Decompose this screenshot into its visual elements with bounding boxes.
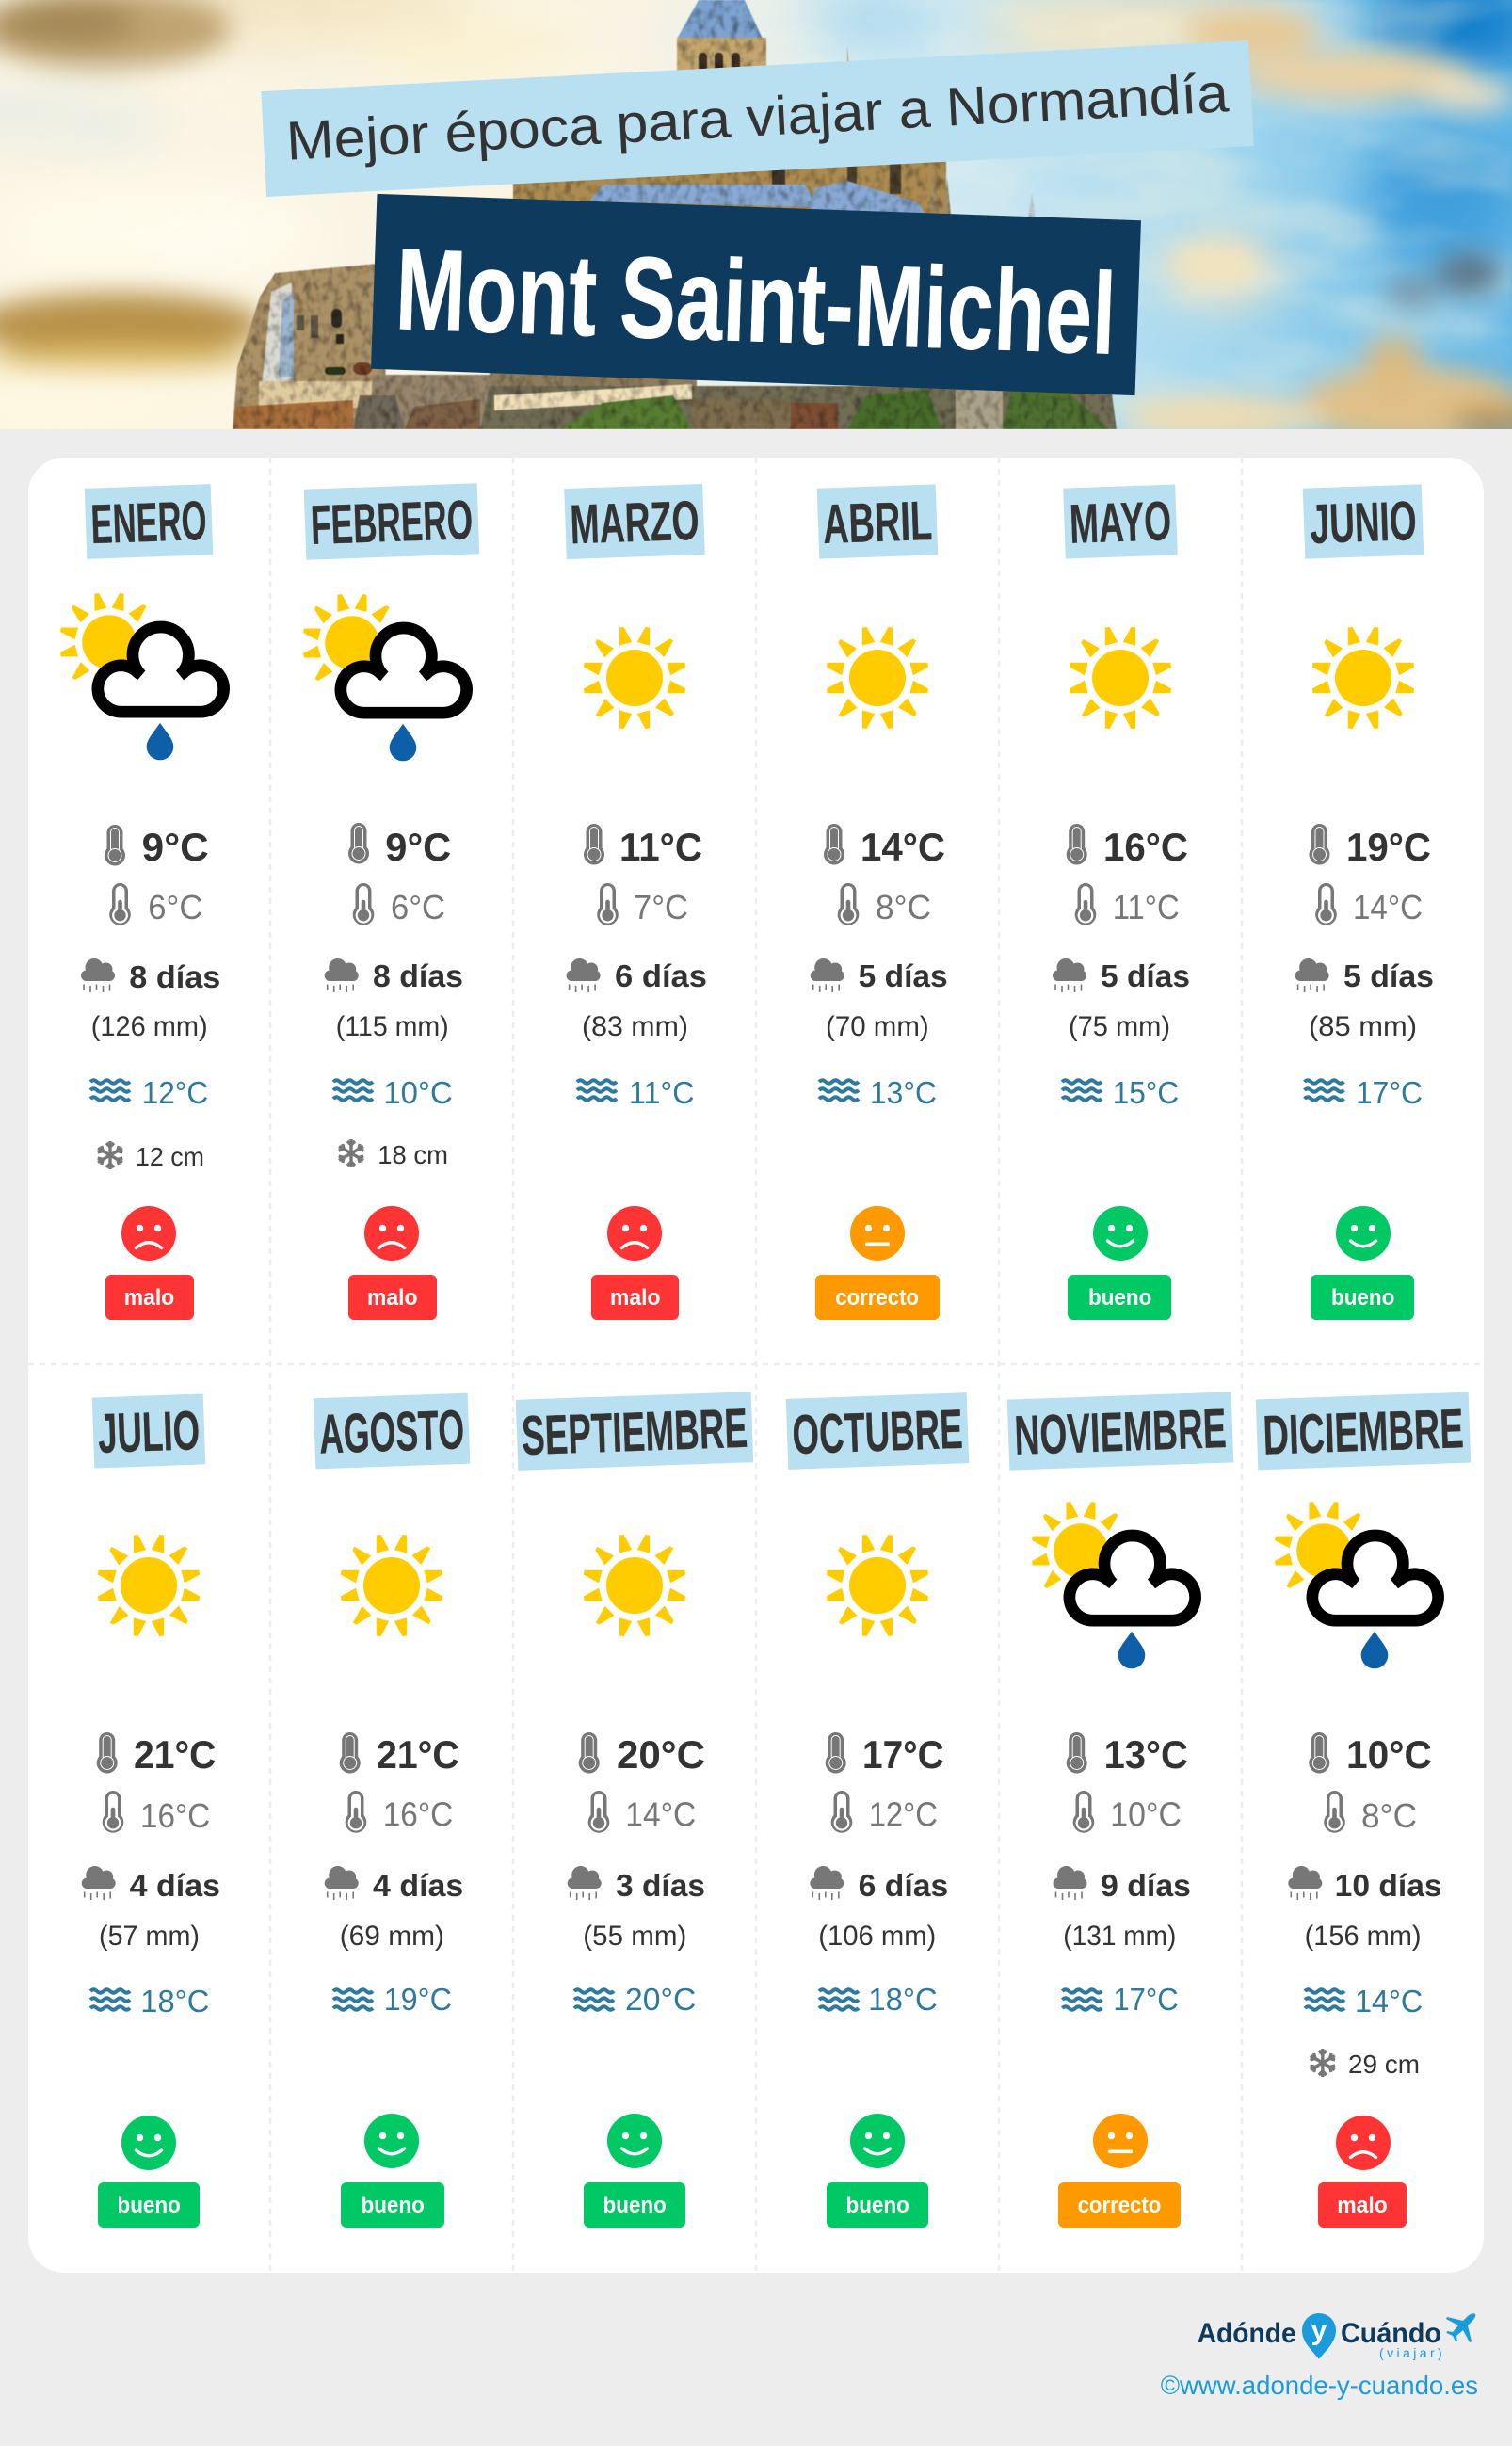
rating: correcto xyxy=(1058,2114,1181,2228)
heading: abril: ABRIL xyxy=(822,490,933,555)
snow xyxy=(96,1141,204,1171)
snow: 18 cm xyxy=(378,1140,448,1169)
sea temperature: 12°C xyxy=(142,1075,208,1110)
low temperature: 8°C xyxy=(876,888,931,926)
low temperature xyxy=(588,1791,696,1834)
high temperature xyxy=(105,825,209,869)
heading: agosto xyxy=(314,1393,470,1469)
sea temperature xyxy=(90,1984,209,2019)
footer logo: Adónde y Cuándo: Adónde xyxy=(1198,2318,1296,2349)
icon: sun xyxy=(827,1535,928,1636)
high temperature: 9°C xyxy=(142,825,209,869)
panel: septiembre xyxy=(516,1392,753,2228)
sea temperature xyxy=(1305,1984,1423,2019)
heading: enero: ENERO xyxy=(89,490,208,555)
heading: mayo: MAYO xyxy=(1069,490,1172,555)
rainy days xyxy=(82,1866,220,1903)
panel: junio xyxy=(1295,484,1434,1320)
high temperature xyxy=(579,1732,705,1777)
icon: map pin xyxy=(1302,2313,1336,2359)
snow xyxy=(337,1139,448,1169)
low temperature xyxy=(1075,883,1180,926)
rating: bueno: bueno xyxy=(1088,1285,1151,1311)
high temperature: 20°C xyxy=(617,1732,705,1777)
rating: malo xyxy=(348,1206,437,1320)
heading: julio xyxy=(92,1393,205,1469)
heading: noviembre xyxy=(1007,1392,1233,1471)
low temperature: 6°C xyxy=(148,888,202,926)
heading: marzo xyxy=(564,484,705,559)
rating: malo xyxy=(591,1206,679,1320)
icon: sun xyxy=(341,1535,442,1636)
low temperature xyxy=(1324,1791,1417,1835)
icon: sun, cloud and rain xyxy=(1276,1503,1439,1668)
high temperature xyxy=(97,1732,216,1777)
high temperature xyxy=(826,1732,944,1777)
low temperature xyxy=(1315,883,1423,926)
icon: airplane xyxy=(1446,2313,1475,2342)
sea temperature xyxy=(574,1982,696,2017)
sea temperature xyxy=(1305,1075,1423,1110)
panel: octubre xyxy=(786,1392,969,2228)
icon: sun xyxy=(98,1535,200,1636)
rainy days: 8 días xyxy=(373,958,463,993)
sea temperature: 10°C xyxy=(383,1075,453,1110)
low temperature: 11°C xyxy=(1113,888,1180,926)
rainy days xyxy=(811,958,948,993)
sea temperature: 17°C xyxy=(1356,1075,1423,1110)
rating: bueno: bueno xyxy=(117,2193,181,2218)
icon: sun, cloud and rain xyxy=(1033,1503,1196,1668)
high temperature: 21°C xyxy=(134,1732,216,1777)
rating: bueno xyxy=(341,2114,444,2228)
high temperature: 9°C xyxy=(385,825,451,869)
sea temperature xyxy=(333,1075,453,1110)
low temperature: 16°C xyxy=(383,1794,453,1834)
rating: bueno xyxy=(827,2114,928,2228)
rating: bueno xyxy=(98,2116,200,2228)
rating: correcto: correcto xyxy=(835,1285,919,1311)
rainy days: 6 días xyxy=(859,1868,948,1903)
rating: correcto: correcto xyxy=(1078,2193,1161,2218)
sea temperature xyxy=(577,1075,695,1110)
panel: mayo xyxy=(1053,484,1190,1320)
panel: marzo xyxy=(564,484,707,1320)
high temperature xyxy=(1067,1732,1188,1777)
sea temperature: 19°C xyxy=(384,1982,452,2017)
snow xyxy=(1309,2049,1420,2079)
sea temperature: 17°C xyxy=(1113,1982,1179,2017)
rainy days: 8 días xyxy=(129,959,220,994)
heading: octubre xyxy=(786,1392,969,1470)
rainfall: (75 mm) xyxy=(1069,1011,1170,1042)
rating: bueno: bueno xyxy=(845,2193,909,2218)
low temperature: 6°C xyxy=(391,888,445,926)
low temperature: 16°C xyxy=(140,1796,210,1835)
high temperature xyxy=(348,823,451,869)
rainy days xyxy=(1288,1866,1442,1903)
rating: malo: malo xyxy=(124,1285,174,1311)
low temperature: 14°C xyxy=(625,1794,696,1834)
rating: malo: malo xyxy=(1337,2193,1388,2218)
rainfall: (156 mm) xyxy=(1305,1921,1422,1952)
icon: sun xyxy=(584,627,685,729)
icon: sun xyxy=(584,1535,685,1636)
rainy days xyxy=(325,958,463,993)
rainy days xyxy=(568,1866,705,1903)
heading: septiembre xyxy=(516,1392,753,1471)
rainy days: 4 días xyxy=(373,1868,463,1903)
panel: agosto xyxy=(314,1393,470,2228)
high temperature: 14°C xyxy=(861,825,945,869)
rainy days: 9 días xyxy=(1101,1868,1191,1903)
rainy days: 6 días xyxy=(615,958,707,993)
high temperature xyxy=(1309,1732,1432,1777)
rainfall: (69 mm) xyxy=(340,1921,444,1952)
rating: malo xyxy=(105,1206,194,1320)
footer logo: Adónde y Cuándo xyxy=(1198,2313,1475,2360)
rainy days xyxy=(567,958,707,993)
heading: febrero xyxy=(304,483,479,560)
rainy days xyxy=(325,1866,463,1903)
icon: sun, cloud and rain xyxy=(304,595,467,761)
rainy days xyxy=(810,1866,948,1903)
low temperature xyxy=(109,883,202,926)
high temperature: 11°C xyxy=(619,825,702,869)
sea temperature: 14°C xyxy=(1355,1984,1423,2019)
rainfall: (83 mm) xyxy=(582,1011,688,1042)
icon: sun xyxy=(1312,627,1414,729)
low temperature xyxy=(838,883,931,926)
title banner xyxy=(371,194,1141,395)
rainfall: (55 mm) xyxy=(583,1921,686,1952)
rainy days: 4 días xyxy=(130,1868,220,1903)
sea temperature: 11°C xyxy=(629,1075,695,1110)
rating: bueno xyxy=(1068,1206,1171,1320)
heading: febrero: FEBRERO xyxy=(310,489,474,556)
footer logo: Adónde y Cuándo: (viajar) xyxy=(1379,2345,1442,2360)
rainfall: (131 mm) xyxy=(1063,1921,1176,1952)
rainy days: 5 días xyxy=(859,958,948,993)
icon: sun xyxy=(1070,627,1171,729)
rating: bueno: bueno xyxy=(1331,1285,1394,1311)
high temperature: 21°C xyxy=(377,1732,459,1777)
low temperature: 10°C xyxy=(1110,1794,1182,1834)
high temperature: 13°C xyxy=(1104,1732,1188,1777)
header photo: Mont Saint-Michel against cloudy sky xyxy=(0,0,1512,443)
sea temperature xyxy=(819,1982,938,2017)
panel: julio xyxy=(82,1393,220,2228)
footer website: ©www.adonde-y-cuando.es xyxy=(1161,2371,1478,2400)
icon: map pin: y xyxy=(1311,2315,1327,2346)
rainy days: 5 días xyxy=(1101,958,1190,993)
rainfall: (57 mm) xyxy=(99,1921,200,1952)
low temperature xyxy=(1073,1791,1182,1834)
heading: enero xyxy=(85,484,213,559)
panel: abril xyxy=(811,484,948,1320)
heading: julio: JULIO xyxy=(97,1399,201,1465)
low temperature xyxy=(597,883,688,926)
rating: correcto xyxy=(815,1206,940,1320)
high temperature xyxy=(824,824,945,869)
calendar card xyxy=(28,458,1484,2273)
icon: sun, cloud and rain xyxy=(61,594,224,760)
high temperature xyxy=(1067,824,1188,869)
heading: mayo xyxy=(1063,484,1178,559)
rainfall: (106 mm) xyxy=(818,1921,936,1952)
low temperature: 14°C xyxy=(1353,888,1423,926)
low temperature xyxy=(831,1791,938,1834)
heading: junio xyxy=(1303,484,1424,559)
heading: septiembre: SEPTIEMBRE xyxy=(521,1397,748,1467)
sea temperature xyxy=(1062,1982,1179,2017)
sea temperature xyxy=(90,1075,208,1110)
title banner: Mont Saint-Michel xyxy=(394,225,1118,379)
heading: junio: JUNIO xyxy=(1309,490,1418,555)
low temperature: 7°C xyxy=(634,888,688,926)
rainfall: (85 mm) xyxy=(1309,1011,1417,1042)
sea temperature: 13°C xyxy=(870,1075,937,1110)
high temperature: 19°C xyxy=(1346,825,1431,869)
low temperature: 12°C xyxy=(869,1794,938,1834)
high temperature: 17°C xyxy=(862,1732,944,1777)
sea temperature: 20°C xyxy=(625,1982,696,2017)
rainfall: (126 mm) xyxy=(91,1011,208,1042)
rating: malo xyxy=(1318,2116,1407,2228)
rating: bueno xyxy=(1311,1206,1414,1320)
rainy days: 3 días xyxy=(616,1868,705,1903)
rainfall: (70 mm) xyxy=(826,1011,929,1042)
rating: bueno: bueno xyxy=(603,2193,667,2218)
snow: 29 cm xyxy=(1348,2050,1420,2079)
rainfall: (115 mm) xyxy=(336,1011,449,1042)
heading: octubre: OCTUBRE xyxy=(791,1398,964,1466)
snow: 12 cm xyxy=(136,1142,204,1171)
rating: malo: malo xyxy=(367,1285,418,1311)
high temperature xyxy=(340,1732,459,1777)
heading: noviembre: NOVIEMBRE xyxy=(1013,1397,1228,1467)
rainy days xyxy=(81,958,220,994)
subtitle banner xyxy=(261,40,1254,197)
high temperature: 10°C xyxy=(1346,1732,1432,1777)
icon: sun xyxy=(827,627,928,729)
sea temperature xyxy=(819,1075,937,1110)
heading: marzo: MARZO xyxy=(569,490,700,555)
sea temperature xyxy=(1062,1075,1179,1110)
panel: febrero xyxy=(304,483,479,1320)
panel: noviembre xyxy=(1007,1392,1233,2228)
rating: bueno xyxy=(584,2114,685,2228)
low temperature xyxy=(353,883,445,926)
sea temperature: 18°C xyxy=(140,1984,209,2019)
sea temperature xyxy=(333,1982,452,2017)
low temperature: 8°C xyxy=(1361,1796,1417,1835)
rainy days xyxy=(1053,1866,1191,1903)
high temperature xyxy=(1309,824,1431,869)
rainy days: 5 días xyxy=(1343,958,1434,993)
high temperature: 16°C xyxy=(1103,825,1188,869)
heading: abril xyxy=(817,484,938,559)
rainy days xyxy=(1295,958,1434,993)
subtitle banner: Mejor época para viajar a Normandía xyxy=(284,62,1231,172)
sea temperature: 15°C xyxy=(1113,1075,1179,1110)
rating: bueno: bueno xyxy=(362,2193,425,2218)
panel: diciembre xyxy=(1256,1392,1471,2228)
heading: agosto: AGOSTO xyxy=(318,1398,465,1466)
rainy days: 10 días xyxy=(1335,1868,1442,1903)
high temperature xyxy=(584,824,702,869)
rainy days xyxy=(1053,958,1190,993)
panel: enero xyxy=(61,484,224,1320)
low temperature xyxy=(103,1791,210,1835)
sea temperature: 18°C xyxy=(868,1982,938,2017)
low temperature xyxy=(346,1791,453,1834)
footer logo: Adónde y Cuándo: Cuándo xyxy=(1341,2318,1441,2349)
rating: malo: malo xyxy=(610,1285,661,1311)
